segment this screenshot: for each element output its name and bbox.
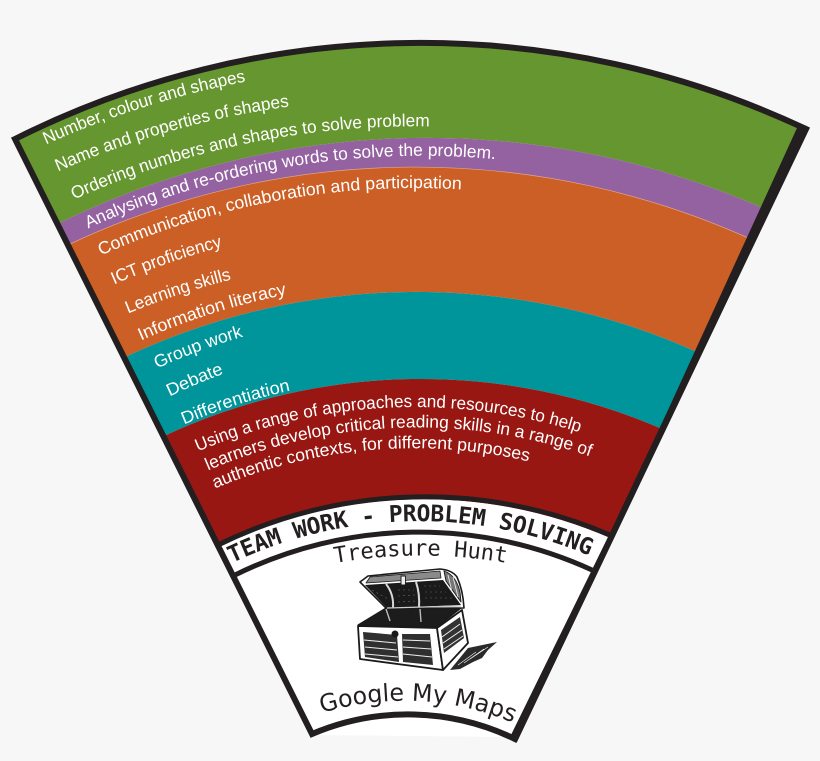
text: information literacy: Information literacy [138,286,285,340]
icon: treasure chest [358,569,497,670]
text: learning skills: Learning skills [124,270,230,313]
panel: teal band [126,292,695,435]
panel: red band [166,379,660,548]
text: critical reading description: Using a range of approaches and resources to help [194,395,581,450]
text: ICT proficiency: ICT proficiency [110,238,220,284]
text: name and properties of shapes: Name and properties of shapes [54,98,288,171]
panel: orange band [70,166,747,356]
text: critical reading description: learners develop critical reading skills in a range of [204,414,594,470]
text: critical reading description: authentic contexts, for different purposes [213,436,530,488]
text: group work: Group work [154,326,244,366]
panel: white lower section [216,499,610,741]
heading: treasure hunt: Treasure Hunt [333,540,506,562]
panel: purple band [60,138,761,244]
panel: green band [19,46,797,223]
heading: team work - problem solving: TEAM WORK - PROBLEM SOLVING [226,504,594,561]
heading: google my maps: Google My Maps [320,683,516,722]
text: ordering numbers and shapes: Ordering numbers and shapes to solve problem [72,114,429,198]
text: differentiation: Differentiation [180,382,290,424]
text: critical reading description [194,395,594,488]
text: debate: Debate [166,366,222,396]
text: communication, collaboration and participation: Communication, collaboration and participation [98,175,461,254]
text: analysing and re-ordering words: Analysing and re-ordering words to solve the problem. [88,143,494,228]
text: number, colour and shapes: Number, colour and shapes [42,73,245,144]
